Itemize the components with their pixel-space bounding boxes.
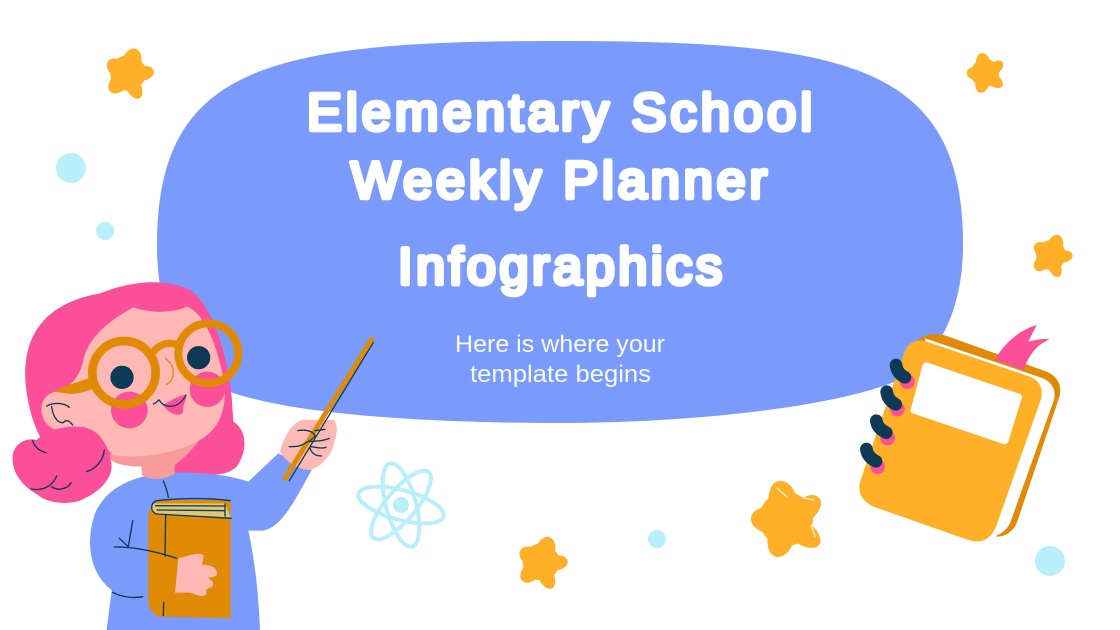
subtitle: template begins	[470, 361, 651, 388]
glasses	[92, 323, 238, 404]
hair back	[25, 282, 244, 475]
hair bun	[13, 427, 112, 503]
decorative circles	[56, 153, 1065, 576]
star top left	[96, 40, 160, 106]
raised hand	[280, 419, 337, 470]
title: Infographics	[398, 238, 722, 296]
star large bottom	[751, 481, 821, 557]
pointer stick	[285, 339, 373, 481]
bookmark	[995, 325, 1049, 370]
star top right	[967, 53, 1003, 93]
body	[90, 453, 312, 630]
blush	[111, 372, 225, 428]
spiral rings	[866, 365, 915, 474]
lower hand	[175, 554, 217, 596]
notebook	[859, 325, 1060, 541]
title	[307, 84, 812, 296]
subtitle: Here is where your	[455, 331, 665, 358]
book held by girl	[148, 499, 232, 618]
cover label	[910, 363, 1022, 444]
eyes	[110, 346, 210, 389]
face	[41, 307, 225, 456]
glasses temple	[53, 376, 97, 394]
title: Weekly Planner	[351, 152, 767, 210]
line details	[31, 395, 186, 497]
arm outline	[113, 521, 177, 597]
character: girl teacher	[13, 282, 373, 630]
mouth	[163, 395, 186, 415]
title: Elementary School	[307, 84, 812, 142]
star right	[1023, 227, 1079, 283]
subtitle	[455, 331, 665, 388]
raised hand fingers	[289, 429, 329, 456]
neck and chin shadow	[107, 433, 203, 479]
title blob panel	[157, 41, 963, 423]
notebook cover	[859, 341, 1042, 541]
icon: atom	[355, 460, 447, 550]
star bottom centre	[507, 528, 575, 596]
